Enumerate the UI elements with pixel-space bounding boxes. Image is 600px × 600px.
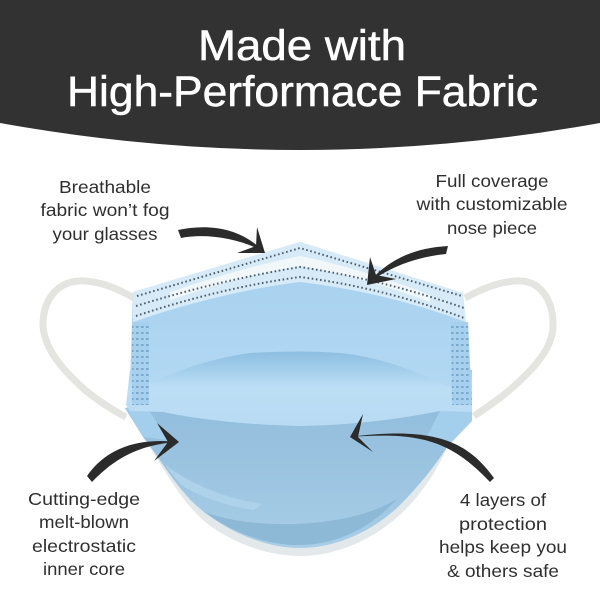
right side stitching dots — [451, 322, 472, 405]
label: layers: 4 layers of — [460, 490, 546, 510]
lower fold shade — [165, 465, 262, 510]
mask illustration — [43, 242, 553, 556]
label: breathable: Breathable — [59, 177, 151, 197]
chin edge — [143, 437, 447, 556]
label: layers: protection — [459, 514, 547, 534]
nose band — [133, 242, 466, 322]
arrow: fabric — [178, 227, 265, 253]
arrow: layers — [350, 414, 494, 482]
label: full coverage: Full coverage — [436, 171, 548, 191]
label: full coverage — [415, 171, 568, 238]
lower fold line — [205, 498, 398, 545]
right lower tab — [425, 410, 472, 447]
title — [67, 22, 538, 116]
left lower tab — [126, 408, 168, 440]
label: inner core: electrostatic — [32, 536, 136, 556]
arrow: nose piece — [367, 246, 448, 285]
left side stitching dots — [132, 322, 149, 405]
lower pleat — [125, 380, 472, 548]
upper panel — [130, 242, 472, 387]
label: layers: & others safe — [447, 561, 559, 581]
label: layers — [439, 490, 567, 581]
left ear loop — [43, 281, 134, 417]
arrow: melt-blown core — [87, 423, 179, 482]
label: breathable: your glasses — [52, 224, 158, 244]
label: full coverage: nose piece — [447, 218, 537, 238]
middle pleat — [126, 340, 472, 426]
label: breathable: fabric won’t fog — [40, 200, 170, 220]
title: High-Performace Fabric — [67, 68, 538, 116]
label: inner core — [28, 489, 140, 579]
label: breathable — [40, 177, 170, 244]
right ear loop — [465, 281, 553, 416]
label: inner core: inner core — [43, 559, 125, 579]
title: Made with — [198, 22, 406, 70]
header banner — [0, 0, 600, 150]
label: layers: helps keep you — [439, 537, 567, 557]
label: inner core: Cutting-edge — [28, 489, 140, 509]
label: full coverage: with customizable — [415, 194, 568, 214]
label: inner core: melt-blown — [39, 512, 129, 532]
stitching — [136, 248, 464, 318]
